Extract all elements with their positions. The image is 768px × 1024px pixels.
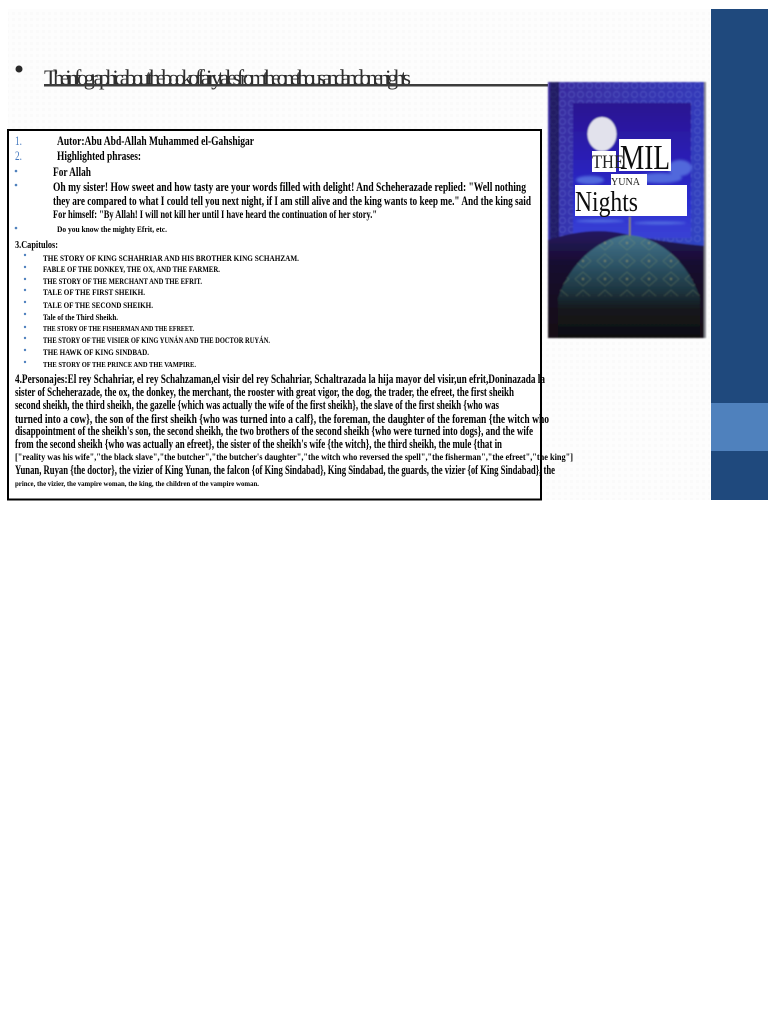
characters paragraph bbox=[15, 372, 573, 488]
panel: book details bbox=[8, 130, 541, 500]
cover title boxes bbox=[592, 151, 616, 172]
right sidebar bbox=[711, 9, 768, 500]
chapters list: THE STORY OF KING SCHAHRIAR AND HIS BROTHER KING SCHAHZAM. bbox=[43, 254, 299, 263]
chapters list bbox=[15, 240, 299, 369]
slide background bbox=[8, 9, 710, 500]
chapters list: THE HAWK OF KING SINDBAD. bbox=[43, 348, 149, 357]
characters paragraph: prince, the vizier, the vampire woman, the king, the children of the vampire woman. bbox=[15, 479, 259, 488]
cover title text: YUNA bbox=[611, 176, 640, 188]
sidebar accent block bbox=[711, 403, 768, 451]
author and phrases list: Do you know the mighty Efrit, etc. bbox=[57, 225, 167, 234]
chapters list: FABLE OF THE DONKEY, THE OX, AND THE FARMER. bbox=[43, 265, 220, 274]
characters paragraph: from the second sheikh {who was actually an efreet}, the sister of the sheikh's wife {the witch}, the third sheikh, the mule {that in bbox=[15, 437, 502, 451]
chapters list: Tale of the Third Sheikh. bbox=[43, 313, 118, 322]
author and phrases list: Autor:Abu Abd-Allah Muhammed el-Gahshigar bbox=[57, 134, 254, 148]
chapters list: THE STORY OF THE VISIER OF KING YUNÁN AND THE DOCTOR RUYÁN. bbox=[43, 335, 270, 345]
cover photo bbox=[548, 82, 706, 338]
chapters list: TALE OF THE SECOND SHEIKH. bbox=[43, 301, 153, 310]
book cover image bbox=[548, 82, 706, 338]
characters paragraph: sister of Scheherazade, the ox, the donkey, the merchant, the rooster with great vigor, the dog, the trader, the efreet, the first sheikh bbox=[15, 385, 514, 399]
cover title text bbox=[575, 138, 670, 218]
chapters list: TALE OF THE FIRST SHEIKH. bbox=[43, 288, 145, 297]
title with underline: Theinfographicaboutthebookoffairytalesfromtheonethousandandonenights bbox=[44, 65, 411, 90]
author and phrases list: 1. bbox=[15, 133, 22, 148]
author and phrases list: Highlighted phrases: bbox=[57, 149, 141, 163]
author and phrases list: 2. bbox=[15, 148, 22, 163]
characters paragraph: 4.Personajes:El rey Schahriar, el rey Schahzaman,el visir del rey Schahriar, Schaltrazada la hija mayor del visir,un efrit,Doninazada la bbox=[15, 372, 546, 386]
author and phrases list bbox=[15, 133, 531, 234]
chapters list: THE STORY OF THE MERCHANT AND THE EFRIT. bbox=[43, 277, 202, 286]
characters paragraph: ["reality was his wife","the black slave","the butcher","the butcher's daughter","the witch who reversed the spell","the fisherman","the efreet","the king"] bbox=[15, 453, 573, 463]
author and phrases list: For Allah bbox=[53, 165, 91, 179]
cover title text: MIL bbox=[620, 138, 670, 177]
author and phrases list: Oh my sister! How sweet and how tasty are your words filled with delight! And Scheherazade replied: "Well nothing bbox=[53, 180, 527, 194]
chapters list: THE STORY OF THE FISHERMAN AND THE EFREET. bbox=[43, 325, 194, 333]
chapters list: 3.Capitulos: bbox=[15, 240, 58, 251]
author and phrases list: they are compared to what I could tell you next night, if I am still alive and the king wants to keep me." And the king said bbox=[53, 194, 531, 208]
characters paragraph: second sheikh, the third sheikh, the gazelle {which was actually the wife of the first sheikh}, the slave of the first sheikh {who was bbox=[15, 398, 499, 412]
title bullet bbox=[16, 66, 22, 72]
characters paragraph: disappointment of the sheikh's son, the second sheikh, the two brothers of the second sheikh {who were turned into dogs}, and the wife bbox=[15, 424, 533, 438]
author and phrases list: For himself: "By Allah! I will not kill her until I have heard the continuation of her story." bbox=[53, 207, 377, 221]
chapters list: THE STORY OF THE PRINCE AND THE VAMPIRE. bbox=[43, 361, 196, 369]
characters paragraph: turned into a cow}, the son of the first sheikh {who was turned into a calf}, the foreman, the daughter of the foreman {the witch who bbox=[15, 412, 549, 426]
cover title text: Nights bbox=[575, 187, 638, 218]
cover title text: THE bbox=[592, 152, 624, 173]
